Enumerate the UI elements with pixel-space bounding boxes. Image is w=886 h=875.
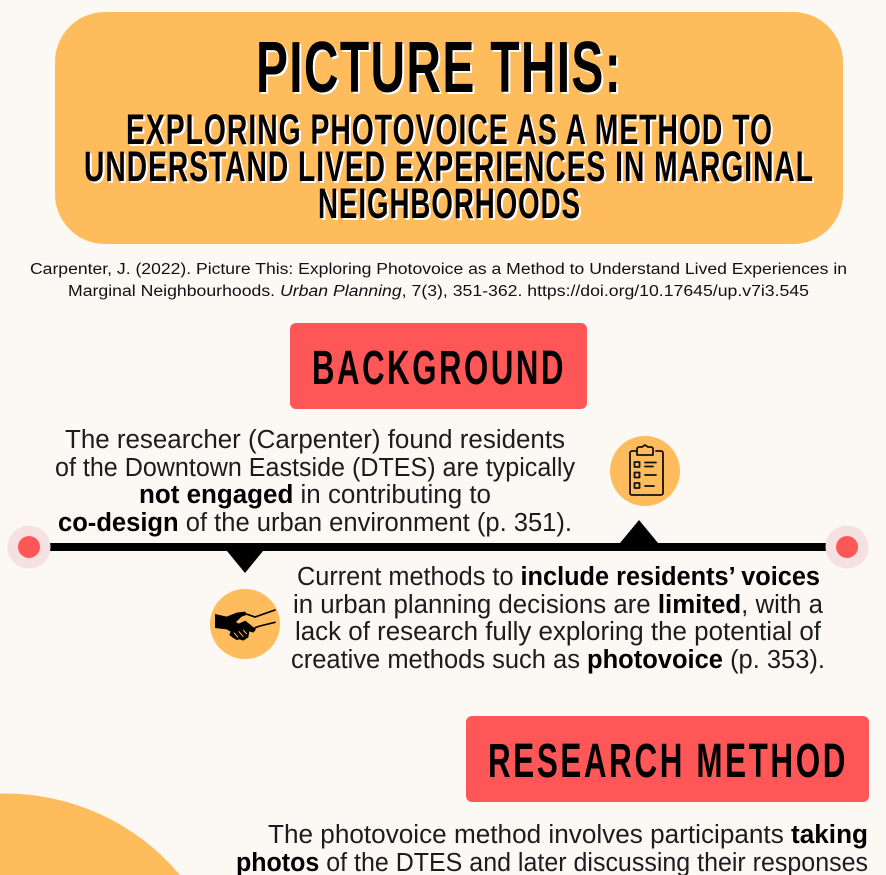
timeline endpoint left: [8, 526, 50, 568]
timeline marker up: [620, 520, 658, 543]
text block: residents not engaged: [55, 426, 575, 537]
timeline endpoint right: [826, 526, 868, 568]
icon: handshake: [210, 589, 280, 659]
text block: residents not engaged: co-design of the urban environment (p. 351).: [58, 509, 572, 537]
text block: photovoice method: The photovoice method involves participants taking: [268, 821, 868, 849]
text block: residents not engaged: of the Downtown Eastside (DTES) are typically: [55, 454, 575, 482]
text block: photovoice method: [236, 821, 868, 875]
text block: residents not engaged: The researcher (Carpenter) found residents: [65, 426, 565, 454]
text block: current methods limited: in urban planning decisions are limited, with a: [293, 591, 824, 619]
text block: current methods limited: creative methods such as photovoice (p. 353).: [291, 646, 825, 674]
timeline marker down: [227, 551, 263, 573]
citation: Marginal Neighbourhoods. Urban Planning , 7(3), 351-362. https://doi.org/10.17645/up.v7i3.545: [68, 283, 809, 300]
decorative orange circle, bottom left: [0, 794, 180, 875]
citation: Carpenter, J. (2022). Picture This: Exploring Photovoice as a Method to Understand Lived Experiences in: [30, 261, 847, 278]
title: [84, 28, 814, 228]
citation: [30, 261, 847, 300]
title: NEIGHBORHOODS: [318, 180, 581, 228]
icon: clipboard checklist: [610, 436, 680, 506]
heading: background: BACKGROUND: [312, 342, 566, 395]
title panel: [55, 12, 843, 244]
heading: background: [290, 323, 587, 409]
text block: current methods limited: lack of research fully exploring the potential of: [295, 618, 822, 646]
title: PICTURE THIS:: [256, 28, 622, 108]
heading: research method: [466, 716, 869, 802]
text block: current methods limited: [291, 563, 825, 674]
text block: residents not engaged: not engaged in contributing to: [139, 481, 491, 509]
timeline: [8, 520, 868, 573]
text block: current methods limited: Current methods to include residents’ voices: [297, 563, 820, 591]
